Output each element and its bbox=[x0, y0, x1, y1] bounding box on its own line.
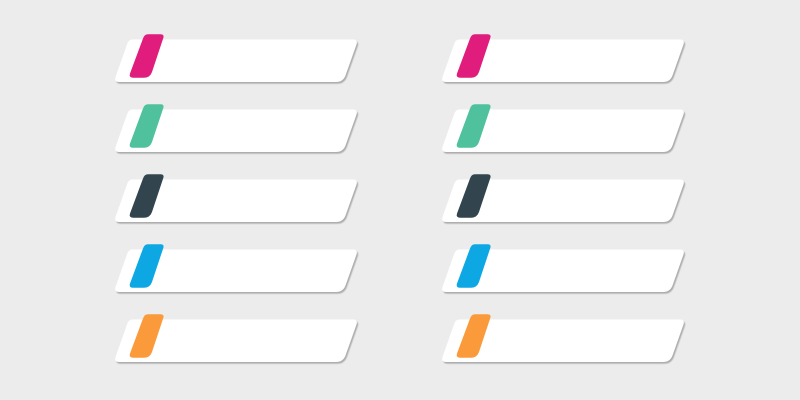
label: right row 4 bbox=[442, 244, 685, 294]
label: left row 4 bbox=[115, 244, 358, 294]
label: left row 1 bbox=[115, 34, 358, 84]
label: left row 2 bbox=[115, 104, 358, 154]
left column bbox=[115, 34, 358, 364]
right column bbox=[442, 34, 685, 364]
label: left row 5 bbox=[115, 314, 358, 364]
label: left row 3 bbox=[115, 174, 358, 224]
label: right row 5 bbox=[442, 314, 685, 364]
label: right row 3 bbox=[442, 174, 685, 224]
label: right row 1 bbox=[442, 34, 685, 84]
label: right row 2 bbox=[442, 104, 685, 154]
